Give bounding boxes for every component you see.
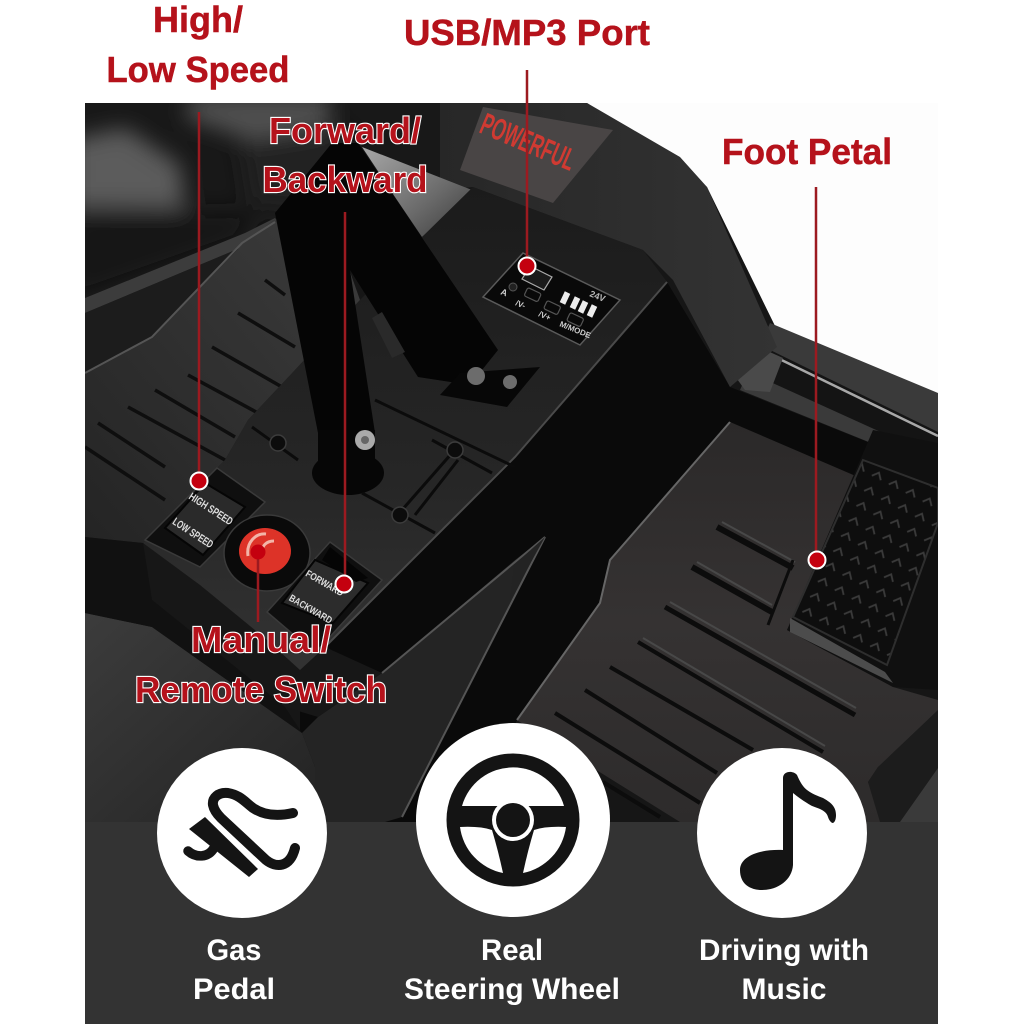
photo: car interior — [85, 103, 938, 822]
Forward/Backward switch — [267, 542, 382, 653]
feature: Driving with Music: Driving with — [699, 934, 869, 967]
High/Low speed switch: HIGH SPEED — [186, 491, 235, 528]
black console side — [300, 284, 868, 822]
callout: Forward/Backward — [262, 110, 428, 592]
USB/MP3 module: /V+ — [537, 310, 552, 323]
callout: Manual/Remote Switch: Remote Switch — [135, 669, 387, 710]
left floor grooves — [85, 280, 295, 500]
lower grey wedge — [302, 553, 530, 822]
callout: High/Low Speed — [106, 0, 290, 490]
USB/MP3 module: A — [499, 287, 509, 298]
rear strip and rail — [740, 323, 938, 442]
console front face — [143, 543, 382, 717]
feature: Real Steering Wheel: Real — [481, 934, 543, 967]
callout: Foot Petal — [722, 131, 892, 568]
feature: Driving with Music — [697, 748, 869, 1006]
callout: USB/MP3 Port: USB/MP3 Port — [404, 12, 650, 53]
icon: steering wheel — [446, 754, 580, 886]
feature: Real Steering Wheel: Steering Wheel — [404, 973, 620, 1006]
USB/MP3 module: 24V — [588, 289, 607, 304]
rail tube — [738, 351, 938, 443]
branded plate — [460, 106, 613, 203]
lower right corner — [868, 710, 938, 822]
callout: Forward/Backward: Forward/ — [269, 110, 421, 151]
steering column — [275, 143, 498, 495]
callout: USB/MP3 Port — [404, 12, 650, 274]
High/Low speed switch: LOW SPEED — [170, 516, 215, 551]
feature: Driving with Music: Music — [742, 973, 826, 1006]
High/Low speed switch — [145, 468, 265, 567]
Foot pedal — [787, 430, 938, 690]
callout: High/Low Speed: Low Speed — [106, 49, 290, 90]
callout: High/Low Speed: High/ — [153, 0, 243, 40]
upper-left seat, blurred — [85, 103, 344, 224]
icon: gas pedal — [188, 793, 295, 877]
callout: Manual/Remote Switch: Manual/ — [191, 619, 331, 660]
USB/MP3 module — [483, 253, 620, 345]
chrome strip — [362, 147, 472, 237]
feature: Gas Pedal — [157, 748, 327, 1006]
white backdrop — [587, 103, 938, 400]
feature: Real Steering Wheel — [404, 723, 620, 1006]
USB/MP3 module: M/MODE — [558, 320, 593, 340]
feature: Gas Pedal: Pedal — [193, 973, 275, 1006]
callout: Foot Petal: Foot Petal — [722, 131, 892, 172]
roll bar arm — [440, 103, 777, 387]
branded plate: POWERFUL — [475, 106, 581, 178]
dashboard rim — [85, 218, 275, 313]
right floor grooves — [555, 522, 856, 817]
console seam lines and screws — [252, 400, 515, 533]
lower-left seat — [85, 613, 315, 822]
callout: Forward/Backward: Backward — [262, 159, 428, 200]
callout: Manual/Remote Switch — [135, 544, 387, 710]
feature: Gas Pedal: Gas — [206, 934, 262, 967]
Forward/Backward switch: BACKWARD — [287, 593, 334, 627]
Forward/Backward switch: FORWARD — [303, 569, 345, 599]
Manual/remote switch button — [224, 515, 310, 591]
mounting plate — [440, 367, 540, 407]
bottom band — [85, 822, 938, 1024]
USB/MP3 module: /V- — [514, 299, 527, 311]
console top plate — [143, 187, 667, 675]
right floor mat — [517, 422, 938, 822]
left floor mat — [85, 215, 360, 543]
icon: music note — [740, 772, 836, 890]
